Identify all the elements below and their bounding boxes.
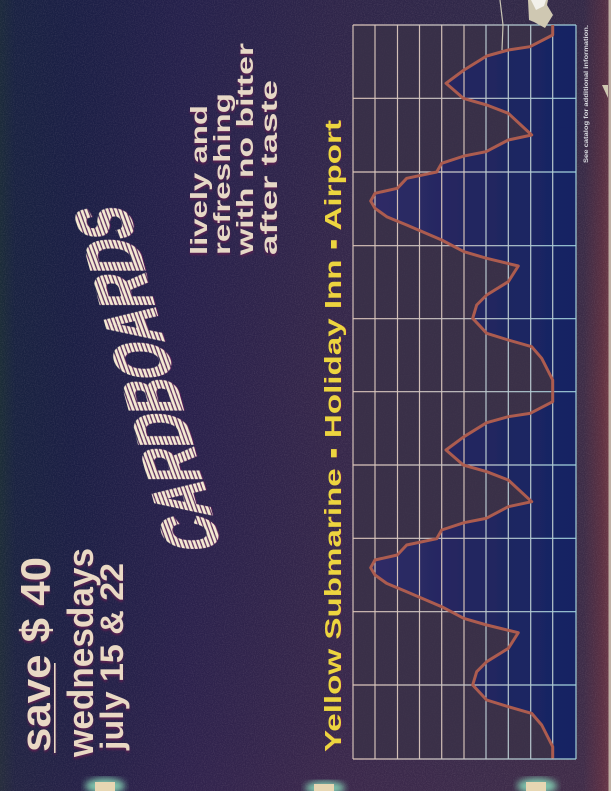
wednesdays: wednesdays <box>60 548 101 758</box>
area under curve: second cycle <box>371 392 576 758</box>
hole glow left <box>85 778 125 791</box>
slogan line 3: with no bitter <box>232 43 258 256</box>
footnote: See catalog for additional information. <box>583 25 590 163</box>
hole glow right <box>517 778 557 791</box>
save underline <box>54 663 56 753</box>
july dates: july 15 & 22 <box>94 563 130 751</box>
data line: second cycle <box>371 392 553 758</box>
chart plot background <box>353 25 576 759</box>
locations line: Yellow Submarine ▪ Holiday Inn ▪ Airport <box>320 120 346 752</box>
line chart <box>353 25 576 759</box>
paper damage: top tear <box>500 0 608 98</box>
slogan line 2: refreshing <box>209 93 235 255</box>
binder holes <box>85 778 557 791</box>
title: CARDBOARDS: CARDBOARDS <box>58 207 238 550</box>
hole glow centre <box>305 781 345 791</box>
save 40 heading: save $ 40 <box>12 557 59 752</box>
area under curve: first cycle <box>371 25 576 392</box>
slogan text block <box>186 43 282 256</box>
offer text block <box>12 548 130 758</box>
slogan line 1: lively and <box>186 105 212 255</box>
data line: first cycle <box>371 25 553 392</box>
slogan line 4: after taste <box>256 80 282 255</box>
